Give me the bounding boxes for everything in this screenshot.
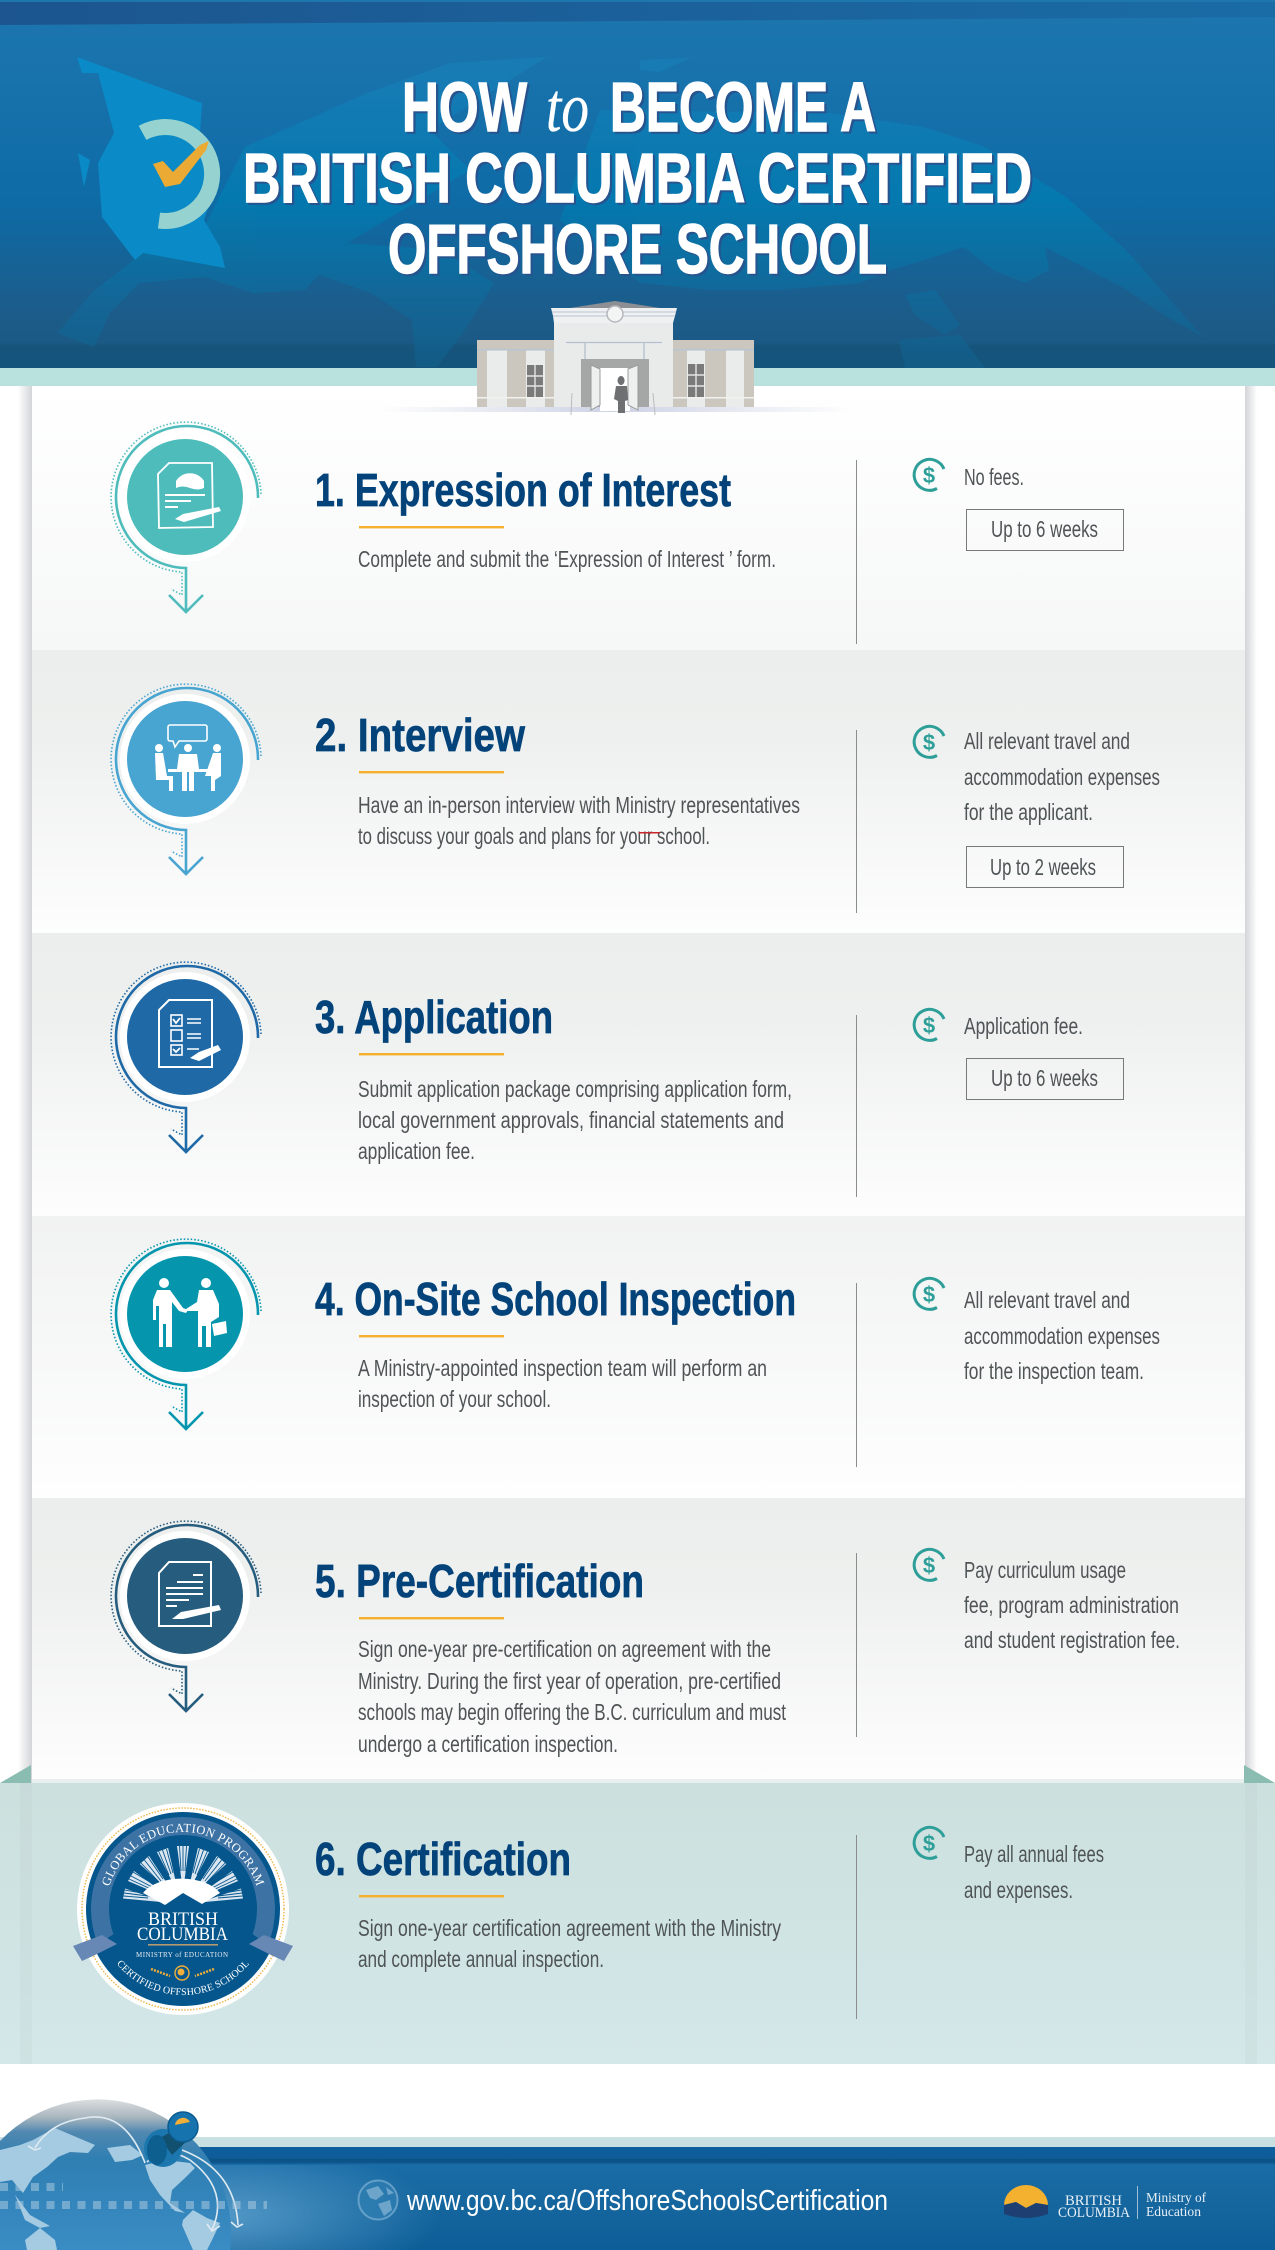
icon: fee: $: [923, 730, 935, 755]
duration box: Up to 6 weeks: [991, 516, 1098, 542]
bottom arc text: CERTIFIED OFFSHORE SCHOOL: [118, 1960, 249, 1996]
description: [358, 1636, 786, 1757]
left wing: [477, 340, 555, 407]
fee text: [964, 1841, 1104, 1903]
cornice: [551, 308, 677, 323]
door opening: [600, 368, 630, 411]
person: [614, 376, 628, 413]
fee text: for the applicant.: [964, 799, 1093, 825]
light rays: [180, 2165, 440, 2250]
panel: step 3: [32, 933, 1245, 1216]
ground shadow: [375, 407, 855, 412]
description: inspection of your school.: [358, 1386, 551, 1412]
title shadow: BECOME A: [612, 70, 878, 148]
title lines: BRITISH COLUMBIA CERTIFIED: [243, 139, 1032, 217]
divider: [856, 730, 857, 913]
seal badge: [73, 1803, 293, 2015]
panel: step 5: [32, 1498, 1245, 1780]
icon: globe with pin: [0, 2099, 267, 2250]
description: [358, 1355, 767, 1412]
world map silhouette: [57, 57, 1203, 368]
title lines: to: [546, 70, 589, 147]
icon: fee: $: [923, 463, 935, 488]
duration box: [966, 1058, 1124, 1100]
BC logo: COLUMBIA: [1058, 2205, 1130, 2221]
row background: [0, 1783, 1275, 2064]
top arc text: GLOBAL EDUCATION PROGRAM: [102, 1824, 264, 1886]
fee text: Pay curriculum usage: [964, 1557, 1126, 1583]
icon: handshake: [111, 1239, 261, 1429]
door surround lines: [566, 342, 662, 360]
underline: [359, 526, 504, 528]
right door: [628, 365, 638, 410]
door frame: [581, 359, 649, 407]
description: [358, 1915, 781, 1972]
underline: [359, 1053, 504, 1055]
fee text: accommodation expenses: [964, 764, 1160, 790]
route arrows: [28, 2117, 243, 2231]
icon: fee: [914, 1549, 944, 1580]
fold right: [1244, 1765, 1275, 1783]
icon: signed document: [111, 1521, 261, 1711]
description: application fee.: [358, 1138, 475, 1164]
side shadows of step column: [18, 386, 1257, 1783]
heading: 6. Certification: [315, 1833, 571, 1885]
mountains: [143, 1879, 220, 1905]
icon: fee: [914, 1278, 944, 1309]
icon: fee: $: [923, 1831, 935, 1856]
fee text: [964, 728, 1160, 825]
panel: step 2: [32, 650, 1245, 933]
underline: [359, 1617, 504, 1619]
duration box: Up to 6 weeks: [991, 1065, 1098, 1091]
icon: checklist: [111, 962, 261, 1152]
fee text: All relevant travel and: [964, 728, 1130, 754]
underline: [359, 1895, 504, 1897]
emblem: [151, 1966, 214, 1980]
row background: [32, 650, 1245, 933]
underline: [359, 1335, 504, 1337]
side tint: [20, 1783, 32, 2064]
description: undergo a certification inspection.: [358, 1731, 618, 1757]
title lines: HOW: [402, 68, 527, 146]
header banner: [0, 0, 1275, 386]
globe sphere: [0, 2099, 231, 2250]
seal badge: COLUMBIA: [137, 1924, 228, 1945]
title lines: OFFSHORE SCHOOL: [388, 210, 887, 288]
heading: 4. On-Site School Inspection: [315, 1273, 796, 1325]
icon: interview: [111, 684, 261, 874]
British Columbia map shape: [77, 57, 225, 268]
description: and complete annual inspection.: [358, 1946, 604, 1972]
divider: [856, 1835, 857, 2019]
description: Submit application package comprising application form,: [358, 1076, 792, 1102]
description: A Ministry-appointed inspection team will perform an: [358, 1355, 767, 1381]
title lines: BECOME A: [610, 68, 876, 146]
header background: [0, 0, 1275, 368]
description: schools may begin offering the B.C. curriculum and must: [358, 1699, 786, 1725]
description: Sign one-year certification agreement with the Ministry: [358, 1915, 781, 1941]
row background: [32, 1498, 1245, 1780]
description: [358, 1076, 792, 1164]
fee text: and expenses.: [964, 1877, 1073, 1903]
stair rails: [571, 393, 655, 415]
row background: [32, 1216, 1245, 1498]
fee text: accommodation expenses: [964, 1323, 1160, 1349]
fee text: and student registration fee.: [964, 1627, 1180, 1653]
icon: fee: $: [923, 1553, 935, 1578]
title shadow: [245, 70, 1034, 290]
fee text: [964, 1287, 1160, 1384]
duration box: Up to 2 weeks: [990, 854, 1096, 880]
title shadow: HOW: [404, 70, 529, 148]
ministry line: MINISTRY of EDUCATION: [136, 1951, 228, 1959]
underline: [359, 771, 504, 773]
icon: document form: [111, 422, 261, 612]
duration box: [966, 510, 1124, 550]
title lines: [243, 68, 1032, 288]
description: local government approvals, financial statements and: [358, 1107, 784, 1133]
teal band: [0, 2137, 1275, 2147]
icon: fee: [914, 1827, 944, 1858]
icon: small globe: [358, 2180, 398, 2220]
icon: fee: [914, 1009, 944, 1040]
icon: fee: [914, 459, 944, 490]
ribbon right: [249, 1935, 293, 1961]
building illustration: [375, 301, 855, 415]
heading: 1. Expression of Interest: [315, 464, 731, 516]
dark top strip: [0, 2, 1275, 25]
footer background: [0, 2147, 1275, 2250]
panel: step 6: [0, 1765, 1275, 2064]
ribbon left: [73, 1935, 117, 1961]
BC logo: BRITISH: [1065, 2193, 1123, 2209]
fold left: [0, 1765, 31, 1783]
dotted strip: [0, 2187, 267, 2205]
divider: [856, 1015, 857, 1197]
BC logo: Education: [1146, 2205, 1201, 2220]
fee text: [964, 1557, 1180, 1653]
teal band: [0, 368, 1275, 386]
description: to discuss your goals and plans for your school.: [358, 823, 710, 849]
fee text: Application fee.: [964, 1013, 1083, 1039]
description: Complete and submit the ‘Expression of Interest ’ form.: [358, 546, 776, 572]
central block: [554, 323, 673, 407]
divider: [856, 460, 857, 644]
clock: [607, 306, 623, 322]
description: Ministry. During the first year of operation, pre-certified: [358, 1668, 781, 1694]
fee text: All relevant travel and: [964, 1287, 1130, 1313]
row background: [32, 386, 1245, 650]
logo check mark: [153, 141, 209, 187]
title: [243, 68, 1034, 290]
panel: step 1: [32, 386, 1245, 650]
heading: 5. Pre-Certification: [315, 1555, 644, 1607]
icon: fee: $: [923, 1013, 935, 1038]
description: Sign one-year pre-certification on agreement with the: [358, 1636, 771, 1662]
BC logo: [1004, 2185, 1206, 2221]
British Columbia wordmark: BRITISH: [148, 1909, 218, 1930]
description: [358, 792, 800, 849]
Vancouver Island: [78, 153, 90, 187]
fee text: No fees.: [964, 464, 1024, 490]
heading: 2. Interview: [315, 709, 525, 761]
website URL: www.gov.bc.ca/OffshoreSchoolsCertification: [406, 2185, 888, 2217]
right wing: [673, 340, 754, 407]
panel: step 4: [32, 1216, 1245, 1498]
logo ring: [142, 127, 212, 221]
icon: fee: [914, 726, 944, 757]
fee text: fee, program administration: [964, 1592, 1179, 1618]
footer: [0, 2099, 1275, 2250]
divider: [856, 1283, 857, 1467]
left door: [591, 365, 600, 410]
heading: 3. Application: [315, 991, 553, 1043]
duration box: [966, 846, 1124, 888]
icon: fee: $: [923, 1282, 935, 1307]
title shadow: OFFSHORE SCHOOL: [390, 212, 889, 290]
pin: [144, 2112, 198, 2167]
divider: [856, 1553, 857, 1737]
description: Have an in-person interview with Ministry representatives: [358, 792, 800, 818]
pediment: [570, 301, 660, 308]
sun rays: [123, 1846, 243, 1902]
row background: [32, 933, 1245, 1216]
fee text: Pay all annual fees: [964, 1841, 1104, 1867]
BC logo: Ministry of: [1146, 2191, 1206, 2206]
fee text: for the inspection team.: [964, 1358, 1144, 1384]
continents: [0, 2128, 220, 2250]
